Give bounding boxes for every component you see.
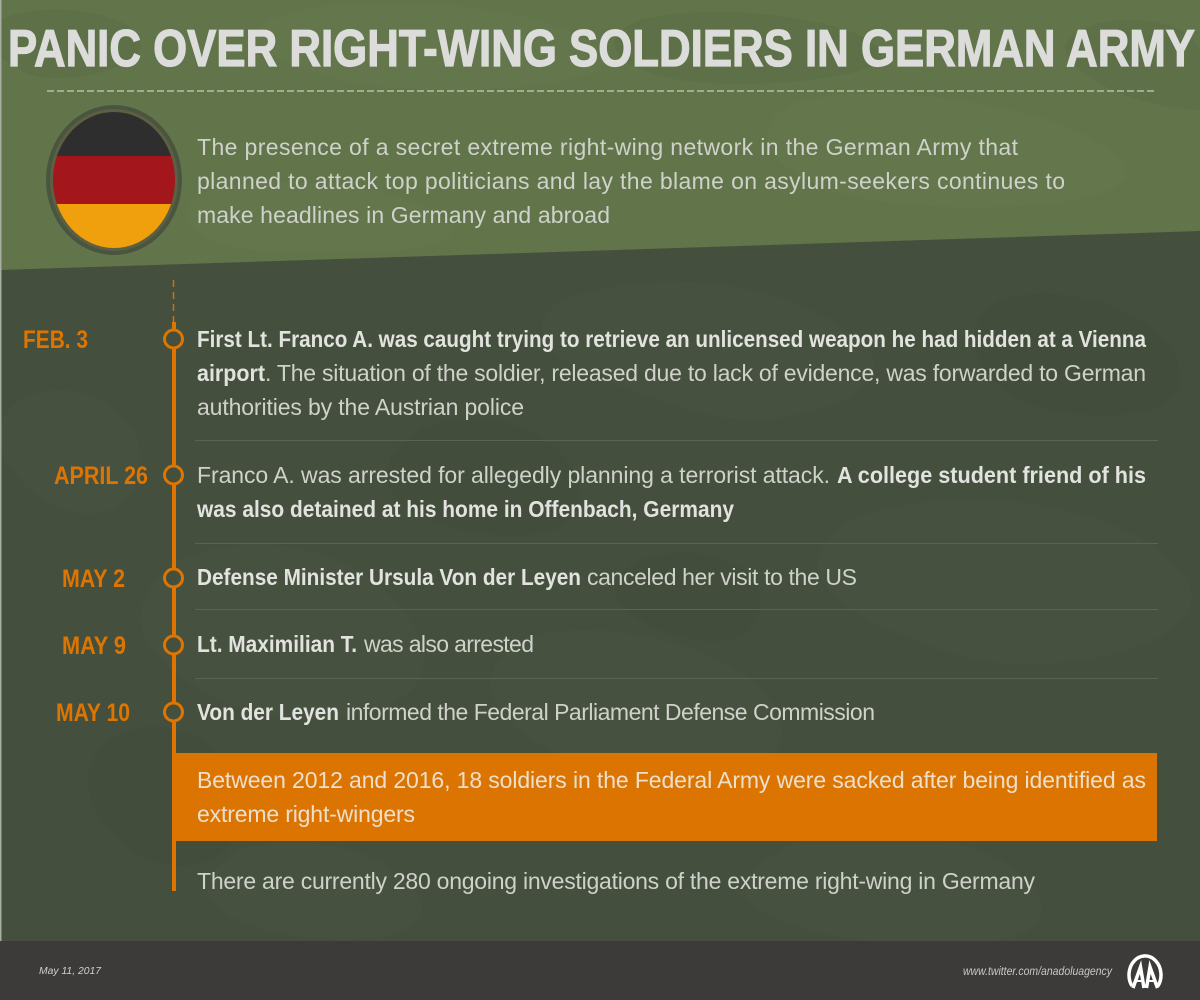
- event: April 26: APRIL 26: [54, 462, 148, 490]
- title divider: [47, 90, 1154, 92]
- event: May 2: Defense Minister Ursula Von der Leyen: [197, 564, 581, 590]
- event: May 2: MAY 2: [62, 565, 125, 593]
- event: Feb. 3: authorities by the Austrian police: [197, 394, 524, 420]
- intro text: [197, 134, 1065, 228]
- callout: soldiers sacked: extreme right-wingers: [197, 801, 415, 827]
- event: April 26: [54, 462, 1146, 522]
- event: May 9: MAY 9: [62, 632, 126, 660]
- footer twitter link: www.twitter.com/anadoluagency: [963, 966, 1113, 978]
- intro text: planned to attack top politicians and lay the blame on asylum-seekers continues to: [197, 168, 1065, 194]
- event: May 10: MAY 10: [56, 699, 130, 727]
- timeline axis: [172, 280, 176, 891]
- event: Feb. 3: FEB. 3: [23, 326, 88, 354]
- event: Feb. 3: [23, 326, 1146, 420]
- event: April 26: A college student friend of his: [837, 462, 1146, 488]
- footer date: May 11, 2017: [39, 965, 102, 977]
- event: May 2: [62, 564, 857, 593]
- row dividers: [195, 440, 1158, 678]
- callout: soldiers sacked: Between 2012 and 2016, 18 soldiers in the Federal Army were sacked after being identified as: [197, 767, 1146, 793]
- footer bar: [0, 941, 1200, 1000]
- callout: soldiers sacked: [175, 753, 1157, 841]
- event: May 9: Lt. Maximilian T.: [197, 631, 357, 657]
- icon: German flag badge: [46, 105, 182, 255]
- event: April 26: Franco A. was arrested for allegedly planning a terrorist attack.: [197, 462, 830, 488]
- event: May 10: [56, 699, 875, 727]
- closing statement: There are currently 280 ongoing investigations of the extreme right-wing in Germany: [197, 868, 1036, 894]
- event: May 9: was also arrested: [363, 631, 534, 657]
- event: May 10: Von der Leyen: [197, 699, 339, 725]
- event: May 2: canceled her visit to the US: [587, 564, 857, 590]
- event: May 10: informed the Federal Parliament Defense Commission: [346, 699, 875, 725]
- panel: green header background: [0, 0, 1200, 270]
- event: Feb. 3: airport: [197, 360, 265, 386]
- icon: Anadolu Agency logo: [1129, 956, 1161, 988]
- panel: dark lower background: [0, 220, 1200, 945]
- intro text: The presence of a secret extreme right-wing network in the German Army that: [197, 134, 1019, 160]
- intro text: make headlines in Germany and abroad: [197, 202, 610, 228]
- event: May 9: [62, 631, 534, 660]
- event: April 26: was also detained at his home in Offenbach, Germany: [196, 496, 734, 522]
- left edge line: [0, 0, 2, 941]
- event: Feb. 3: . The situation of the soldier, released due to lack of evidence, was forwarded to German: [265, 360, 1146, 386]
